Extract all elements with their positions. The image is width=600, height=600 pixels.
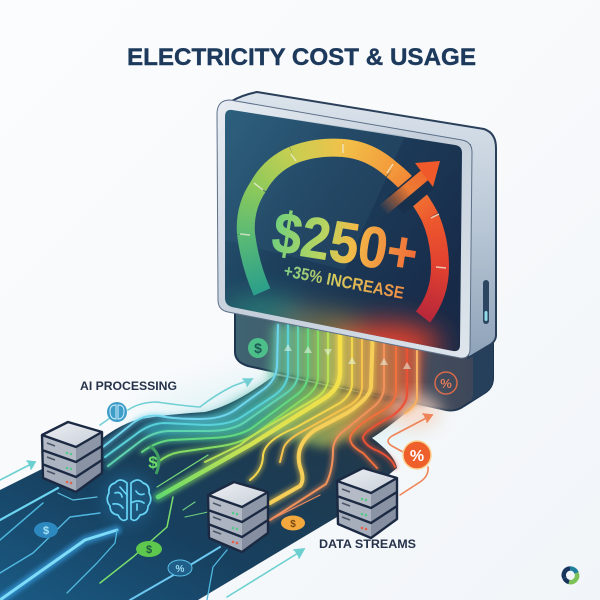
- server stack right: [337, 468, 397, 538]
- icon: orange dollar coin: [281, 516, 305, 530]
- icon: percent badge on base: %: [440, 376, 452, 391]
- icon: blue dollar coin: [34, 522, 58, 538]
- monitor base: [235, 300, 493, 410]
- monitor side and top: [232, 92, 496, 358]
- label: data streams: DATA STREAMS: [319, 537, 416, 551]
- icon: orange dollar coin: $: [290, 519, 296, 530]
- icon: brain: [102, 473, 154, 525]
- data highway: [0, 325, 441, 600]
- icon: green dollar glyph: $: [148, 453, 158, 472]
- arrow: lower teal input: [227, 549, 304, 597]
- monitor shadow and band glow: [130, 370, 440, 470]
- arrow: top-left teal input: [0, 461, 35, 480]
- rainbow lines glow: [103, 325, 417, 520]
- monitor: [217, 92, 496, 367]
- screen glass highlight: [225, 110, 405, 270]
- icon: AI brain badge: [107, 402, 127, 422]
- big value: $250+: [268, 200, 422, 287]
- icon: green dollar glyph: [148, 446, 159, 474]
- icon: dollar badge on base: $: [254, 340, 262, 356]
- side indicator slot: [483, 280, 489, 324]
- screen: [225, 110, 462, 351]
- icon: blue percent coin: %: [176, 564, 185, 575]
- label: AI processing: AI PROCESSING: [80, 379, 177, 393]
- blue and green circuit lines: [0, 455, 320, 600]
- icon: green dollar coin: $: [146, 544, 152, 556]
- increase label: +35% INCREASE: [282, 261, 406, 303]
- icon: blue percent coin: [168, 560, 192, 576]
- arrow: orange percent path: [388, 414, 432, 495]
- server stack left: [42, 422, 102, 492]
- rainbow wash: [140, 325, 425, 448]
- server stack middle: [208, 482, 268, 552]
- gauge arc: [240, 144, 446, 317]
- icon: green dollar coin: [136, 541, 162, 557]
- logo: [564, 568, 577, 582]
- icon: percent badge on base: [435, 372, 457, 394]
- screen bottom colour glow: [222, 296, 440, 367]
- icon: percent badge: %: [410, 448, 424, 465]
- red glow spill: [389, 394, 441, 430]
- icon: blue dollar coin: $: [43, 525, 49, 537]
- flow arrowheads: [284, 344, 411, 369]
- monitor front frame: [217, 100, 472, 358]
- base edge shadow: [278, 376, 425, 406]
- main bright streams: [158, 325, 373, 503]
- title: ELECTRICITY COST & USAGE: [127, 44, 476, 71]
- rainbow lines: [103, 325, 417, 520]
- icon: dollar badge on base: [248, 338, 268, 358]
- arrow: AI processing path: [100, 379, 252, 425]
- gauge arrow: [383, 161, 440, 210]
